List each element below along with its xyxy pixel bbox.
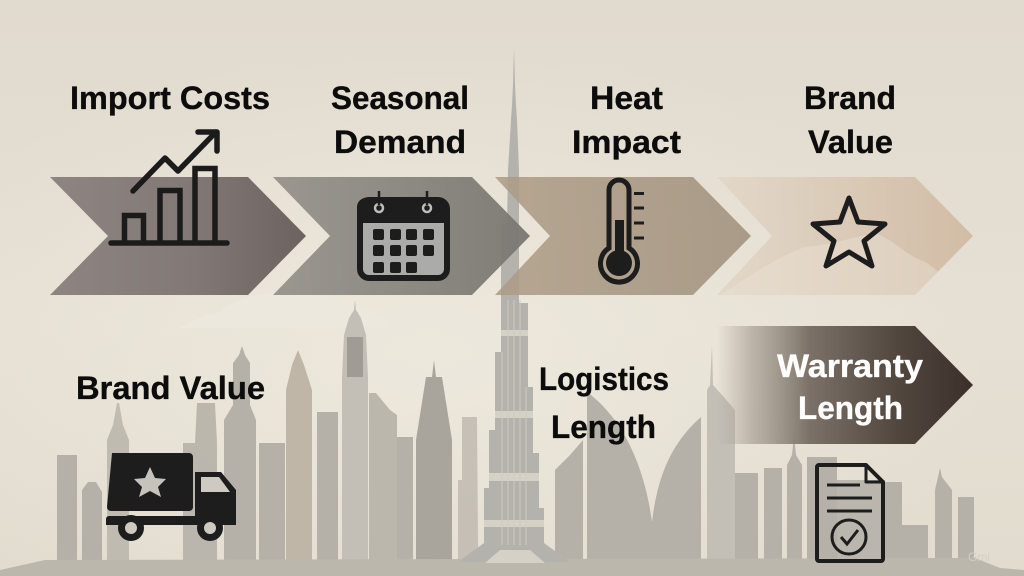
chevron 2 <box>273 177 530 295</box>
icon: rising bar chart <box>111 132 227 243</box>
watermark: Gmi <box>968 550 990 564</box>
icon: warranty document <box>817 465 883 561</box>
heading: brand value: Value <box>808 124 893 160</box>
heading: heat impact: Impact <box>572 124 681 160</box>
heading: warranty length: Warranty <box>777 348 923 384</box>
panel: warranty length <box>717 326 973 561</box>
heading: heat impact <box>572 80 681 160</box>
panel: seasonal demand <box>273 80 530 295</box>
icon: delivery truck <box>106 453 236 541</box>
heading: logistics length <box>539 361 669 445</box>
panel: import costs <box>50 80 306 295</box>
icon: thermometer <box>600 180 644 282</box>
heading: heat impact: Heat <box>590 80 663 116</box>
heading: import costs: Import Costs <box>70 80 270 116</box>
panel: brand value truck <box>76 370 265 541</box>
heading: warranty length <box>777 348 923 426</box>
icon: calendar <box>357 191 449 278</box>
cloud behind skyline <box>178 291 388 328</box>
panel: heat impact <box>495 80 751 295</box>
heading: seasonal demand: Demand <box>334 124 466 160</box>
panel: brand value <box>717 80 973 295</box>
heading: brand value: Brand <box>804 80 896 116</box>
heading: seasonal demand <box>331 80 469 160</box>
cloud seen through chevron <box>768 234 938 295</box>
city skyline silhouette <box>0 300 1024 576</box>
chevron 3 <box>495 177 751 295</box>
heading: logistics length: Length <box>551 409 656 445</box>
heading: logistics length: Logistics <box>539 361 669 397</box>
heading: brand value <box>804 80 896 160</box>
heading: brand value: Brand Value <box>76 370 265 406</box>
icon: star <box>813 198 885 266</box>
heading: warranty length: Length <box>798 390 903 426</box>
burj tower <box>458 48 570 563</box>
chevron 4 <box>717 177 973 295</box>
heading: seasonal demand: Seasonal <box>331 80 469 116</box>
chevron 1 <box>50 177 306 295</box>
arrow banner <box>717 326 973 444</box>
